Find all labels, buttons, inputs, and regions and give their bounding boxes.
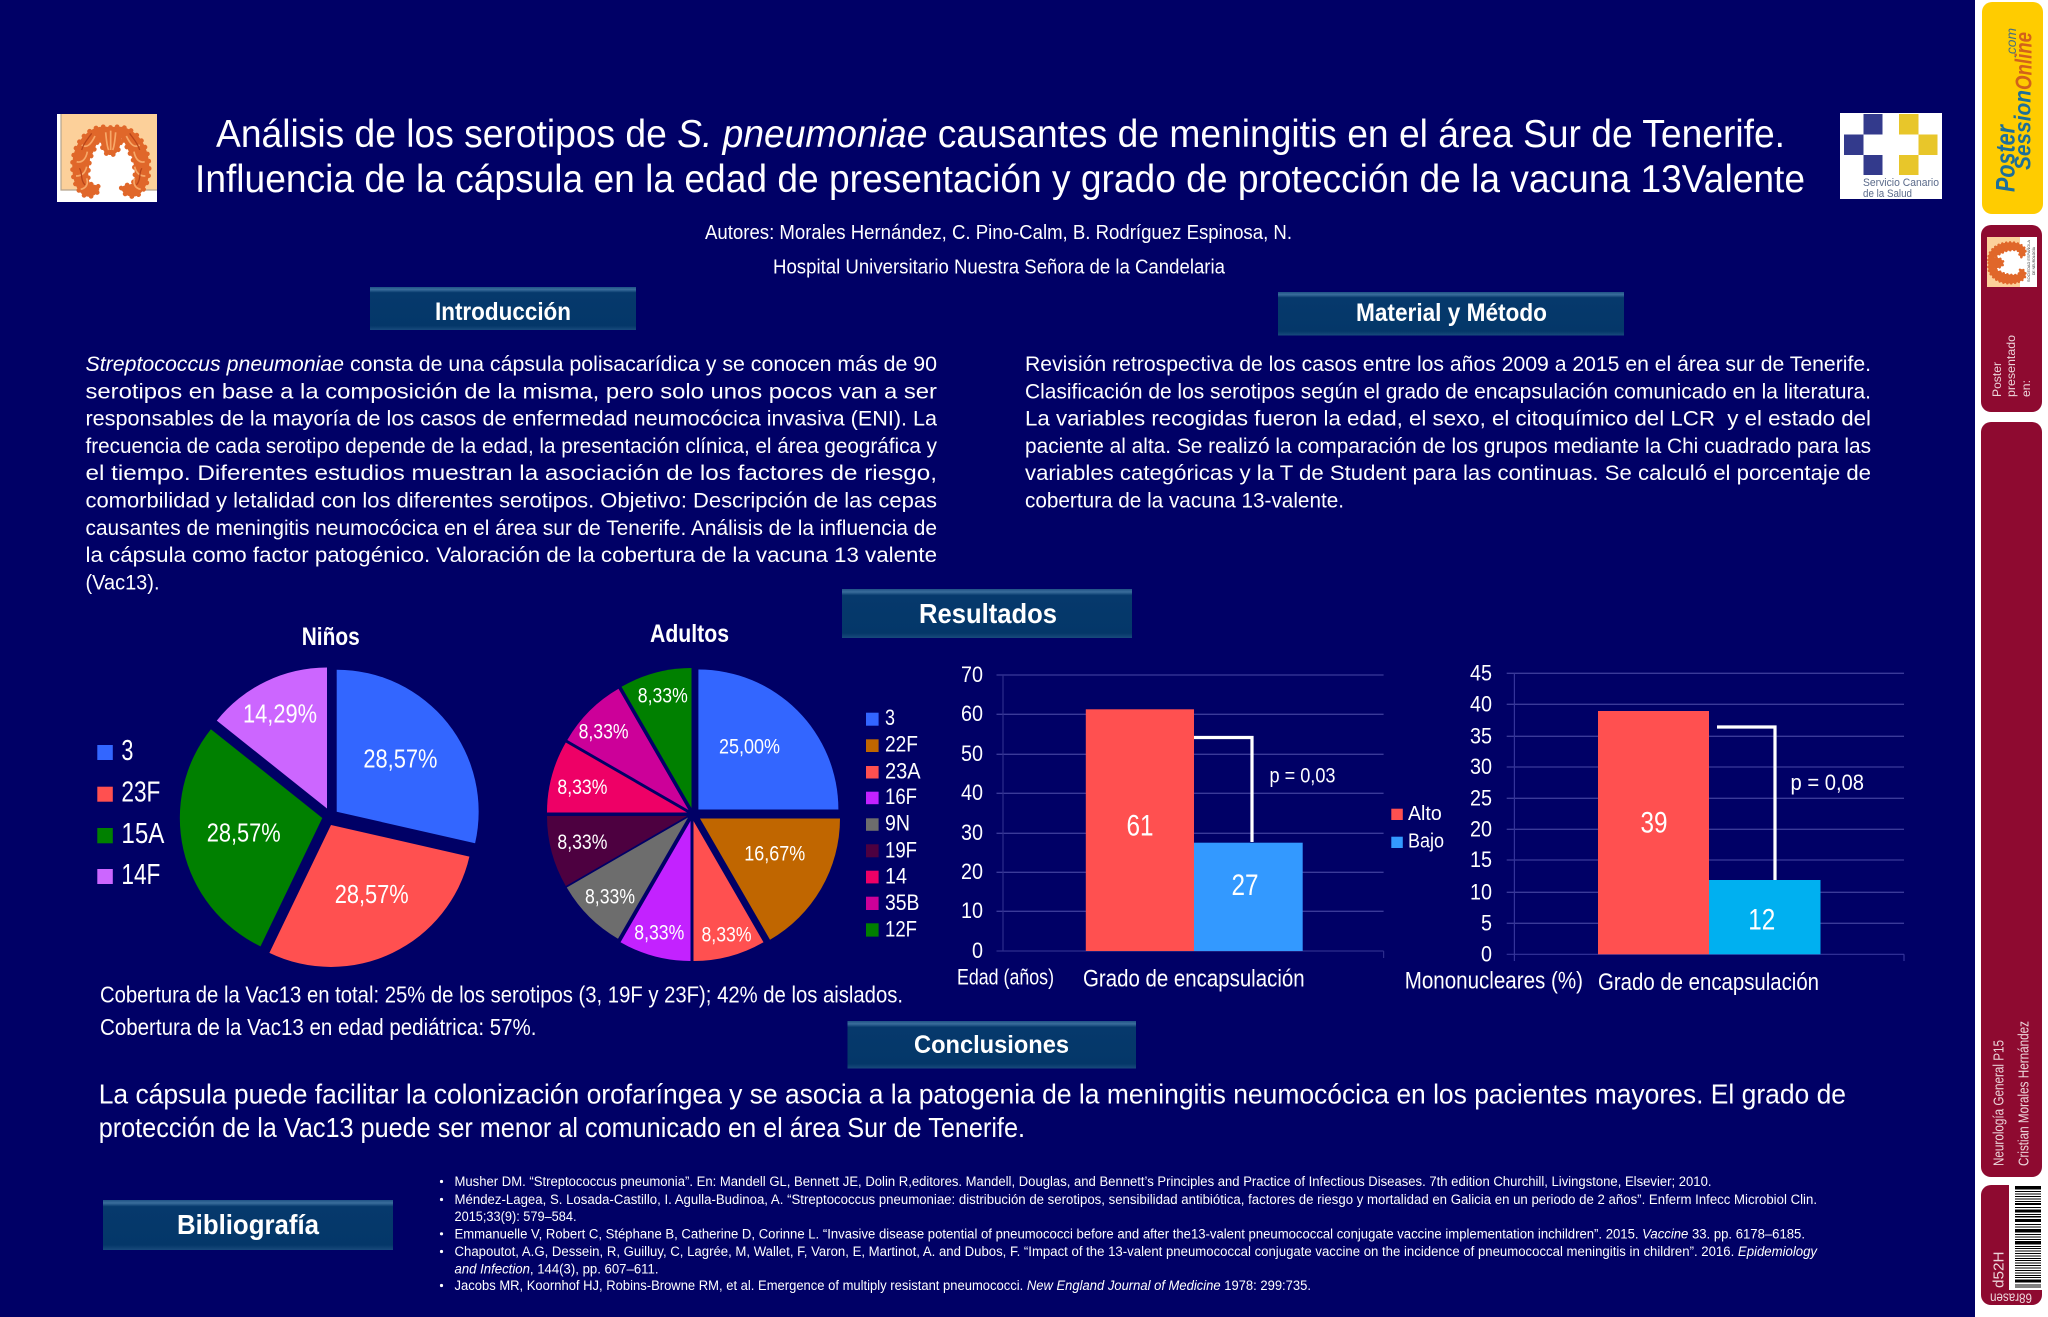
slice: 12F — [622, 668, 692, 808]
heading: Material y Método: Material y Método — [1356, 299, 1547, 327]
slice: 23F — [269, 825, 469, 967]
legend: Adultos: 19F — [885, 837, 917, 862]
slice: 16F — [620, 821, 690, 961]
heading: Introducción: Introducción — [435, 298, 571, 326]
legend: Adultos: 23A — [885, 758, 921, 783]
y axis labels: 5 — [1481, 910, 1492, 936]
legend: Adultos: 9N — [885, 811, 910, 836]
value labels: 28,57% — [207, 818, 281, 848]
p value: p = 0,08 — [1790, 770, 1864, 795]
pie chart: Adultos: Adultos — [650, 620, 729, 648]
y axis labels: 0 — [1481, 942, 1492, 966]
text block: conclusiones — [99, 1078, 1846, 1143]
bar: Alto 39: 39 — [1640, 807, 1668, 840]
legend: grado de encapsulación — [1391, 803, 1444, 852]
references list — [440, 1174, 1818, 1293]
legend: Niños: 14F — [121, 859, 160, 891]
title: Análisis de los serotipos de S. pneumoniae causantes de meningitis en el área Sur de Tenerife. — [216, 113, 1785, 156]
y axis labels: 10 — [1470, 880, 1492, 904]
text block: introducción: comorbilidad y letalidad con los diferentes serotipos. Objetivo: Descripción de las cepas — [86, 488, 937, 512]
legend: grado de encapsulación: Alto — [1408, 803, 1442, 825]
y axis labels: 60 — [961, 701, 983, 726]
sidebar tab: PosterSessionOnline — [1982, 2, 2043, 214]
text block: cobertura: Cobertura de la Vac13 en total: 25% de los serotipos (3, 19F y 23F); 42% de los aislados. — [100, 982, 903, 1008]
value labels — [557, 684, 805, 947]
sidebar tab: PosterSessionOnline: .com — [2003, 28, 2019, 58]
legend: Adultos: 16F — [885, 784, 917, 809]
sidebar tab: poster presentado en: presentado — [2004, 335, 2018, 397]
text block: material y método: paciente al alta. Se realizó la comparación de los grupos mediante la Chi cuadrado para las — [1025, 434, 1871, 458]
p value: p = 0,03 — [1270, 765, 1336, 788]
text block: conclusiones: protección de la Vac13 puede ser menor al comunicado en el área Sur de Tenerife. — [99, 1112, 1025, 1143]
y axis labels: 15 — [1470, 847, 1492, 872]
bar chart: mononucleares — [1405, 660, 1904, 996]
sidebar tab: sesión y autor: Neurología General P15 — [1990, 1040, 2007, 1166]
text block: material y método: variables categóricas y la T de Student para las continuas. Se calculó el porcentaje de — [1025, 461, 1871, 485]
bar: Bajo 12: 12 — [1748, 903, 1775, 936]
legend: Adultos: 22F — [885, 732, 918, 757]
heading: Conclusiones — [848, 1021, 1136, 1068]
sidebar tab: barcode: d52H — [1990, 1252, 2007, 1288]
references list: Jacobs MR, Koornhof HJ, Robins-Browne RM, et al. Emergence of multiply resistant pneumococci. New England Journal of Medicine 1978: 299:735. — [454, 1278, 1311, 1293]
y axis labels: 35 — [1470, 724, 1492, 748]
slice: 3 — [698, 670, 838, 810]
heading: Conclusiones: Conclusiones — [914, 1031, 1069, 1059]
text block: material y método: Revisión retrospectiva de los casos entre los años 2009 a 2015 en el área sur de Tenerife. — [1025, 352, 1871, 376]
slice: 3 — [337, 670, 479, 843]
legend: Niños: 15A — [121, 818, 165, 850]
text block: cobertura: Cobertura de la Vac13 en edad pediátrica: 57%. — [100, 1014, 536, 1040]
legend: Adultos: 35B — [885, 890, 920, 915]
value labels: 8,33% — [585, 885, 635, 908]
bar: Alto 39 — [1598, 711, 1709, 954]
title: Influencia de la cápsula en la edad de presentación y grado de protección de la vacuna 13Valente — [195, 158, 1805, 201]
y axis labels: 45 — [1470, 660, 1492, 686]
bar: Alto 61 — [1086, 709, 1194, 951]
y axis title: Mononucleares (%) — [1405, 967, 1583, 994]
slice: 15A — [180, 729, 322, 946]
text block: cobertura — [100, 982, 903, 1040]
value labels: 8,33% — [638, 684, 688, 707]
hospital: Hospital Universitario Nuestra Señora de la Candelaria — [773, 256, 1226, 278]
y axis labels — [961, 662, 983, 963]
y axis title: Edad (años) — [957, 964, 1054, 989]
text block: material y método: Clasificación de los serotipos según el grado de encapsulación comunicado en la literatura. — [1025, 379, 1871, 403]
y axis labels: 70 — [961, 662, 983, 687]
sidebar tab: poster presentado en: Poster — [1990, 362, 2004, 397]
legend: Adultos — [866, 705, 921, 942]
text block: introducción: (Vac13). — [86, 570, 160, 594]
heading: Bibliografía — [103, 1200, 393, 1250]
text block: introducción: causantes de meningitis neumocócica en el área sur de Tenerife. Análisis de la influencia de — [86, 516, 937, 540]
y axis labels: 25 — [1470, 786, 1492, 810]
pie chart: Adultos — [547, 620, 840, 961]
pie chart: Niños: Niños — [302, 623, 360, 651]
heading: Material y Método — [1278, 292, 1624, 336]
legend: grado de encapsulación: Bajo — [1408, 830, 1444, 852]
sidebar tab: PosterSessionOnline: Poster — [1990, 124, 2020, 192]
bar chart: edad — [957, 662, 1384, 993]
slice: 23A — [694, 821, 764, 961]
title — [195, 113, 1805, 201]
bar: Alto 61: 61 — [1126, 810, 1154, 843]
y axis labels: 10 — [961, 898, 983, 923]
value labels: 28,57% — [363, 744, 437, 774]
text block: material y método: cobertura de la vacuna 13-valente. — [1025, 488, 1344, 512]
y axis labels: 40 — [961, 780, 983, 805]
icon: society logo: SOCIEDAD ESPAÑOLA — [2026, 240, 2031, 282]
logo: Servicio Canario de la Salud: de la Salud — [1863, 188, 1912, 200]
logo: Servicio Canario de la Salud: Servicio Canario — [1863, 177, 1939, 189]
references list: and Infection, 144(3), pp. 607–611. — [454, 1261, 658, 1276]
x axis title: Grado de encapsulación — [1083, 966, 1305, 993]
heading: Resultados — [842, 589, 1132, 638]
text block: introducción: el tiempo. Diferentes estudios muestran la asociación de los factores de riesgo, — [86, 461, 937, 485]
sidebar tab: barcode — [1981, 1185, 2048, 1306]
text block: introducción: Streptococcus pneumoniae consta de una cápsula polisacarídica y se conocen más de 90 — [86, 352, 937, 376]
significance bracket — [1717, 727, 1775, 880]
bar: Bajo 27 — [1194, 843, 1303, 951]
value labels: 8,33% — [702, 924, 752, 947]
text block: introducción: responsables de la mayoría de los casos de enfermedad neumocócica invasiva (ENI). La — [86, 407, 937, 431]
slice: 14F — [217, 668, 327, 808]
bar: Bajo 12 — [1709, 880, 1820, 954]
y axis labels: 30 — [1470, 754, 1492, 779]
bar: Bajo 27: 27 — [1232, 869, 1258, 902]
slice: 19F — [547, 816, 687, 886]
legend: Adultos: 12F — [885, 917, 917, 942]
text block: introducción: la cápsula como factor patogénico. Valoración de la cobertura de la vacuna 13 valente — [86, 543, 937, 567]
authors: Autores: Morales Hernández, C. Pino-Calm, B. Rodríguez Espinosa, N. — [705, 222, 1292, 244]
text block: introducción: serotipos en base a la composición de la misma, pero solo unos pocos van a ser — [86, 379, 937, 403]
value labels: 28,57% — [335, 879, 409, 909]
references list: Musher DM. “Streptococcus pneumonia”. En: Mandell GL, Bennett JE, Dolin R,editores. Mandell, Douglas, and Bennett’s Principles and Practice of Infectious Diseases. 7th edition Churchill, Livingstone, Elsevier; 2010. — [454, 1174, 1712, 1189]
y axis labels: 50 — [961, 741, 983, 766]
pie chart: Niños — [180, 623, 479, 967]
legend: Niños — [97, 735, 165, 891]
text block: conclusiones: La cápsula puede facilitar la colonización orofaríngea y se asocia a la patogenia de la meningitis neumocócica en los pacientes mayores. El grado de — [99, 1078, 1846, 1109]
legend: Niños: 3 — [121, 735, 133, 767]
icon: society logo — [1987, 237, 2037, 287]
x axis title: Grado de encapsulación — [1598, 969, 1819, 996]
heading: Bibliografía: Bibliografía — [177, 1209, 319, 1240]
heading: Resultados: Resultados — [919, 598, 1057, 629]
value labels: 8,33% — [634, 921, 684, 944]
text block: material y método: La variables recogidas fueron la edad, el sexo, el citoquímico del LCR y el estado del — [1025, 407, 1871, 431]
y axis labels: 20 — [1470, 816, 1492, 842]
y axis labels: 0 — [972, 938, 983, 963]
value labels: 8,33% — [557, 776, 607, 799]
value labels: 8,33% — [557, 831, 607, 854]
legend: Adultos: 3 — [885, 705, 895, 730]
value labels: 16,67% — [744, 843, 805, 866]
sidebar tab: poster presentado en: en: — [2019, 380, 2033, 397]
icon: society logo: DE NEUROLOGÍA — [2031, 247, 2036, 275]
value labels: 8,33% — [579, 720, 629, 743]
logo: Servicio Canario de la Salud — [1840, 113, 1942, 200]
legend: Adultos: 14 — [885, 863, 907, 888]
slice: 22F — [700, 818, 840, 940]
value labels: 25,00% — [719, 735, 780, 758]
y axis labels: 30 — [961, 820, 983, 845]
sidebar tab: PosterSessionOnline: Online — [2010, 32, 2036, 90]
text block: introducción: frecuencia de cada serotipo depende de la edad, la presentación clínica, el área geográfica y — [86, 434, 937, 458]
sidebar tab: sesión y autor — [1981, 422, 2042, 1177]
y axis labels — [1470, 660, 1492, 966]
y axis labels: 20 — [961, 859, 983, 884]
text block: material y método — [1025, 352, 1871, 512]
sidebar tab: barcode: 68rasen — [1990, 1290, 2032, 1306]
value labels: 14,29% — [243, 699, 317, 729]
sidebar tab: poster presentado en — [1981, 225, 2042, 412]
significance bracket — [1194, 738, 1252, 842]
slice: 14 — [547, 742, 687, 812]
y axis labels: 40 — [1470, 692, 1492, 716]
heading: Introducción — [370, 287, 636, 330]
value labels — [207, 699, 437, 909]
references list: 2015;33(9): 579–584. — [454, 1209, 576, 1224]
logo: brain society — [57, 114, 157, 202]
text block: introducción — [86, 352, 937, 594]
references list: Emmanuelle V, Robert C, Stéphane B, Catherine D, Corinne L. “Invasive disease potential of pneumococci before and after the13-valent pneumococcal conjugate vaccine implementation inchildren”. 2015. Vaccine 33. pp. 6178–6185. — [454, 1226, 1805, 1241]
sidebar tab: PosterSessionOnline: Session — [2010, 90, 2036, 170]
sidebar tab: sesión y autor: Cristian Morales Hernández — [2015, 1021, 2032, 1166]
legend: Niños: 23F — [121, 777, 160, 809]
slice: 9N — [567, 818, 688, 939]
references list: Méndez-Lagea, S. Losada-Castillo, I. Agulla-Budinoa, A. “Streptococcus pneumoniae: distribución de serotipos, sensibilidad antibiótica, factores de riesgo y mortalidad en Galicia en un periodo de 2 años”. Enferm Infecc Microbiol Clin. — [454, 1192, 1817, 1207]
references list: Chapoutot, A.G, Dessein, R, Guilluy, C, Lagrée, M, Wallet, F, Varon, E, Martinot, A. and Dubos, F. “Impact of the 13-valent pneumococcal conjugate vaccine on the incidence of pneumococcal meningitis in children”. 2016. Epidemiology — [454, 1244, 1818, 1259]
slice: 35B — [567, 689, 688, 810]
